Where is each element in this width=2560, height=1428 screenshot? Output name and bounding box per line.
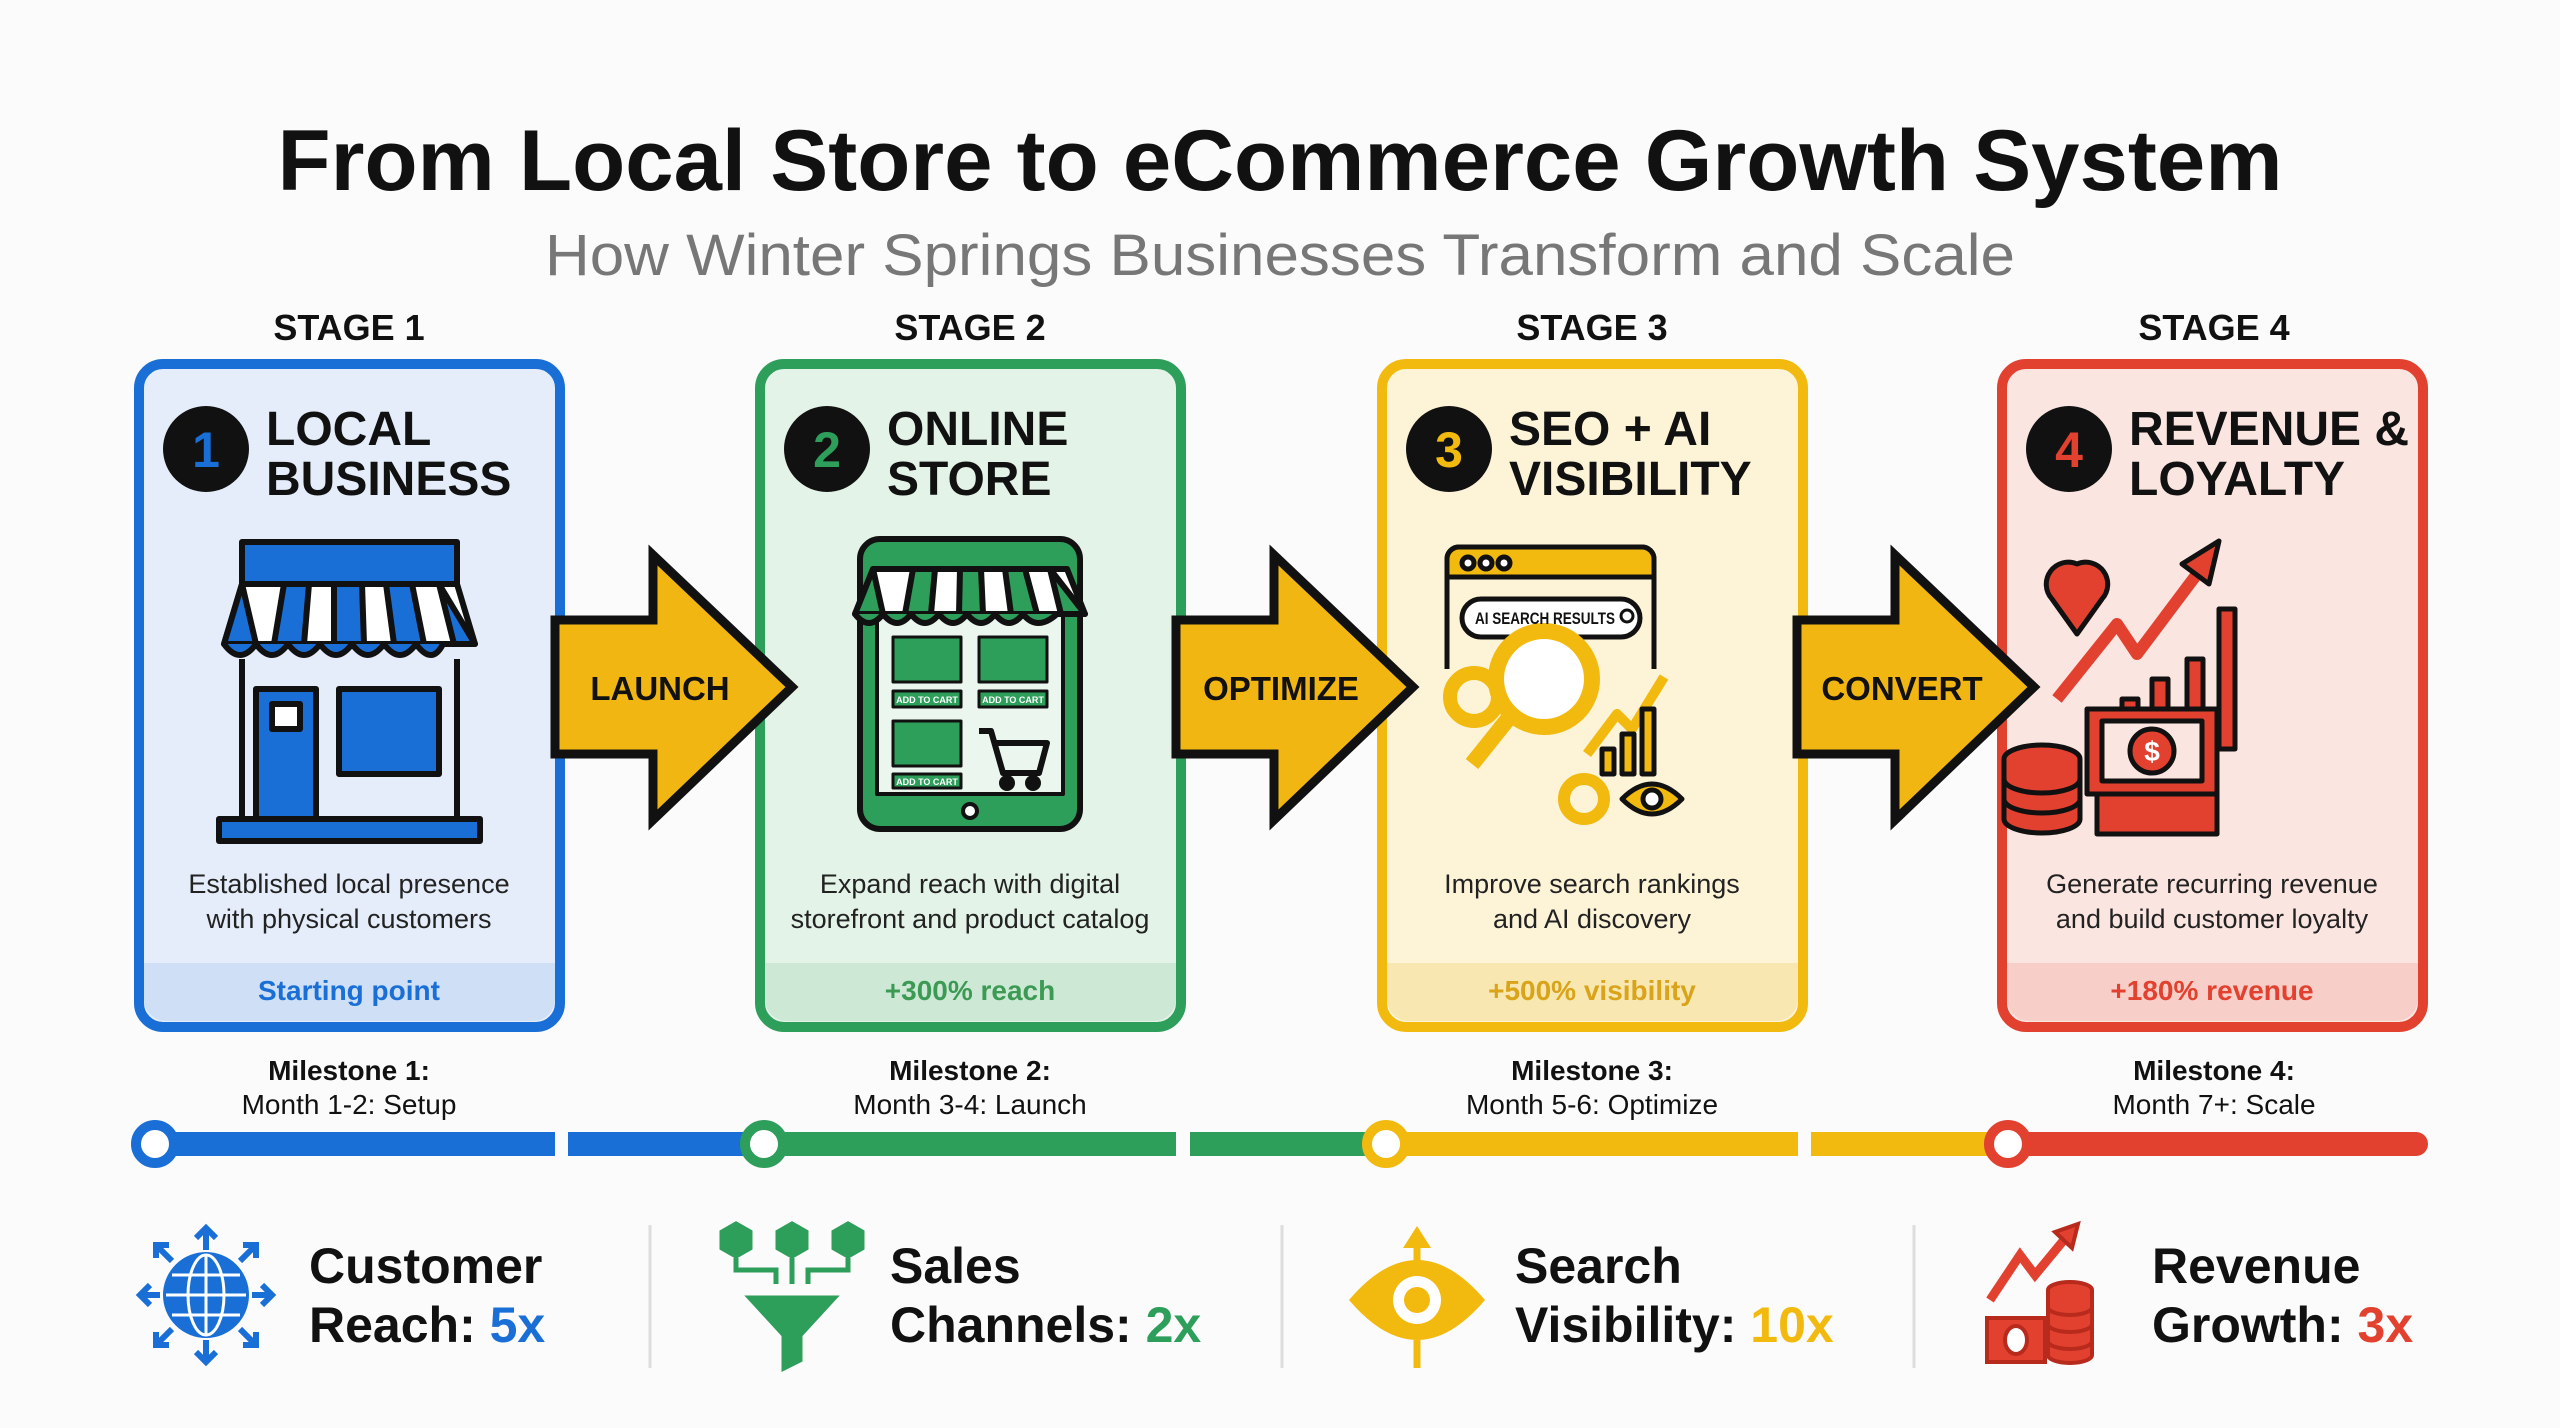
panel: stage 1 local business: Established local presence: [188, 869, 510, 899]
stat: customer reach: [140, 1228, 545, 1362]
milestones text: Milestone 4:: [2133, 1055, 2295, 1086]
milestones text: Milestone 2:: [889, 1055, 1051, 1086]
stage labels: STAGE 1: [273, 307, 425, 348]
timeline: [136, 1125, 2428, 1163]
stage labels: STAGE 2: [894, 307, 1046, 348]
icon: money growth: [1987, 1224, 2092, 1363]
icon: tablet store: [855, 539, 1085, 829]
stat: customer reach: Customer: [309, 1238, 542, 1294]
milestones text: Month 3-4: Launch: [853, 1089, 1087, 1120]
stat: sales channels: Sales: [890, 1238, 1021, 1294]
panel: stage 1 local business: with physical customers: [205, 904, 492, 934]
panel: stage 2 online store: ADD TO CART: [896, 777, 958, 787]
icon: AI search: [1447, 547, 1682, 819]
panel: stage 4 revenue & loyalty: Generate recurring revenue: [2046, 869, 2378, 899]
panel: stage 2 online store: STORE: [887, 453, 1051, 506]
milestones text: Milestone 3:: [1511, 1055, 1673, 1086]
panel: stage 4 revenue & loyalty: LOYALTY: [2129, 453, 2345, 506]
panel: stage 3 SEO + AI: VISIBILITY: [1509, 453, 1752, 506]
stat: customer reach: Reach: 5x: [309, 1297, 545, 1353]
panel: stage 3 SEO + AI: and AI discovery: [1493, 904, 1692, 934]
stat: revenue growth: Growth: 3x: [2152, 1297, 2413, 1353]
stat: search visibility: [1349, 1226, 1834, 1368]
panel: stage 3 SEO + AI: Improve search rankings: [1444, 869, 1740, 899]
stat: sales channels: [722, 1224, 1201, 1368]
icon: revenue growth: [2004, 541, 2235, 834]
panel: stage 2 online store: ADD TO CART: [896, 695, 958, 705]
panel: stage 3 SEO + AI: SEO + AI: [1509, 403, 1711, 456]
arrow: optimize: OPTIMIZE: [1203, 670, 1359, 707]
subtitle: How Winter Springs Businesses Transform and Scale: [545, 223, 2015, 288]
panel: stage 2 online store: ADD TO CART: [982, 695, 1044, 705]
stat: search visibility: Visibility: 10x: [1515, 1297, 1834, 1353]
panel: stage 2 online store: 2: [813, 422, 841, 478]
arrow: launch: LAUNCH: [590, 670, 730, 707]
icon: globe: [140, 1228, 272, 1362]
stage labels: STAGE 3: [1516, 307, 1668, 348]
panel: stage 2 online store: [760, 364, 1181, 1027]
stat: revenue growth: [1987, 1224, 2413, 1363]
panel: stage 1 local business: LOCAL: [266, 403, 431, 456]
panel: stage 3 SEO + AI: AI SEARCH RESULTS: [1475, 609, 1615, 628]
arrow: convert: CONVERT: [1821, 670, 1983, 707]
stat: sales channels: Channels: 2x: [890, 1297, 1201, 1353]
arrow: convert: [1797, 555, 2034, 820]
milestones text: Milestone 1:: [268, 1055, 430, 1086]
panel: stage 3 SEO + AI: +500% visibility: [1488, 975, 1696, 1006]
panel: stage 1 local business: [139, 364, 560, 1027]
panel: stage 4 revenue & loyalty: +180% revenue: [2110, 975, 2314, 1006]
panel: stage 2 online store: storefront and product catalog: [791, 904, 1149, 934]
panel: stage 4 revenue & loyalty: $: [2144, 736, 2160, 767]
panel: stage 1 local business: 1: [192, 422, 220, 478]
arrow: launch: [555, 555, 792, 820]
arrow: optimize: [1176, 555, 1413, 820]
stat: search visibility: Search: [1515, 1238, 1682, 1294]
milestones text: Month 1-2: Setup: [242, 1089, 456, 1120]
panel: stage 3 SEO + AI: [1382, 364, 1803, 1027]
icon: funnel: [722, 1224, 862, 1368]
panel: stage 2 online store: +300% reach: [885, 975, 1055, 1006]
stage labels: [273, 307, 2290, 348]
stat: revenue growth: Revenue: [2152, 1238, 2360, 1294]
milestones text: [242, 1055, 2316, 1120]
icon: storefront: [219, 542, 480, 841]
milestones text: Month 5-6: Optimize: [1466, 1089, 1718, 1120]
panel: stage 4 revenue & loyalty: REVENUE &: [2129, 403, 2409, 456]
icon: eye: [1349, 1226, 1485, 1368]
panel: stage 4 revenue & loyalty: 4: [2055, 422, 2083, 478]
panel: stage 3 SEO + AI: 3: [1435, 422, 1463, 478]
stage labels: STAGE 4: [2138, 307, 2290, 348]
panel: stage 2 online store: Expand reach with digital: [820, 869, 1120, 899]
title: From Local Store to eCommerce Growth System: [278, 113, 2282, 209]
milestones text: Month 7+: Scale: [2112, 1089, 2316, 1120]
panel: stage 2 online store: ONLINE: [887, 403, 1068, 456]
panel: stage 4 revenue & loyalty: [2002, 364, 2423, 1027]
panel: stage 1 local business: Starting point: [258, 975, 440, 1006]
panel: stage 4 revenue & loyalty: and build customer loyalty: [2056, 904, 2369, 934]
panel: stage 1 local business: BUSINESS: [266, 453, 511, 506]
